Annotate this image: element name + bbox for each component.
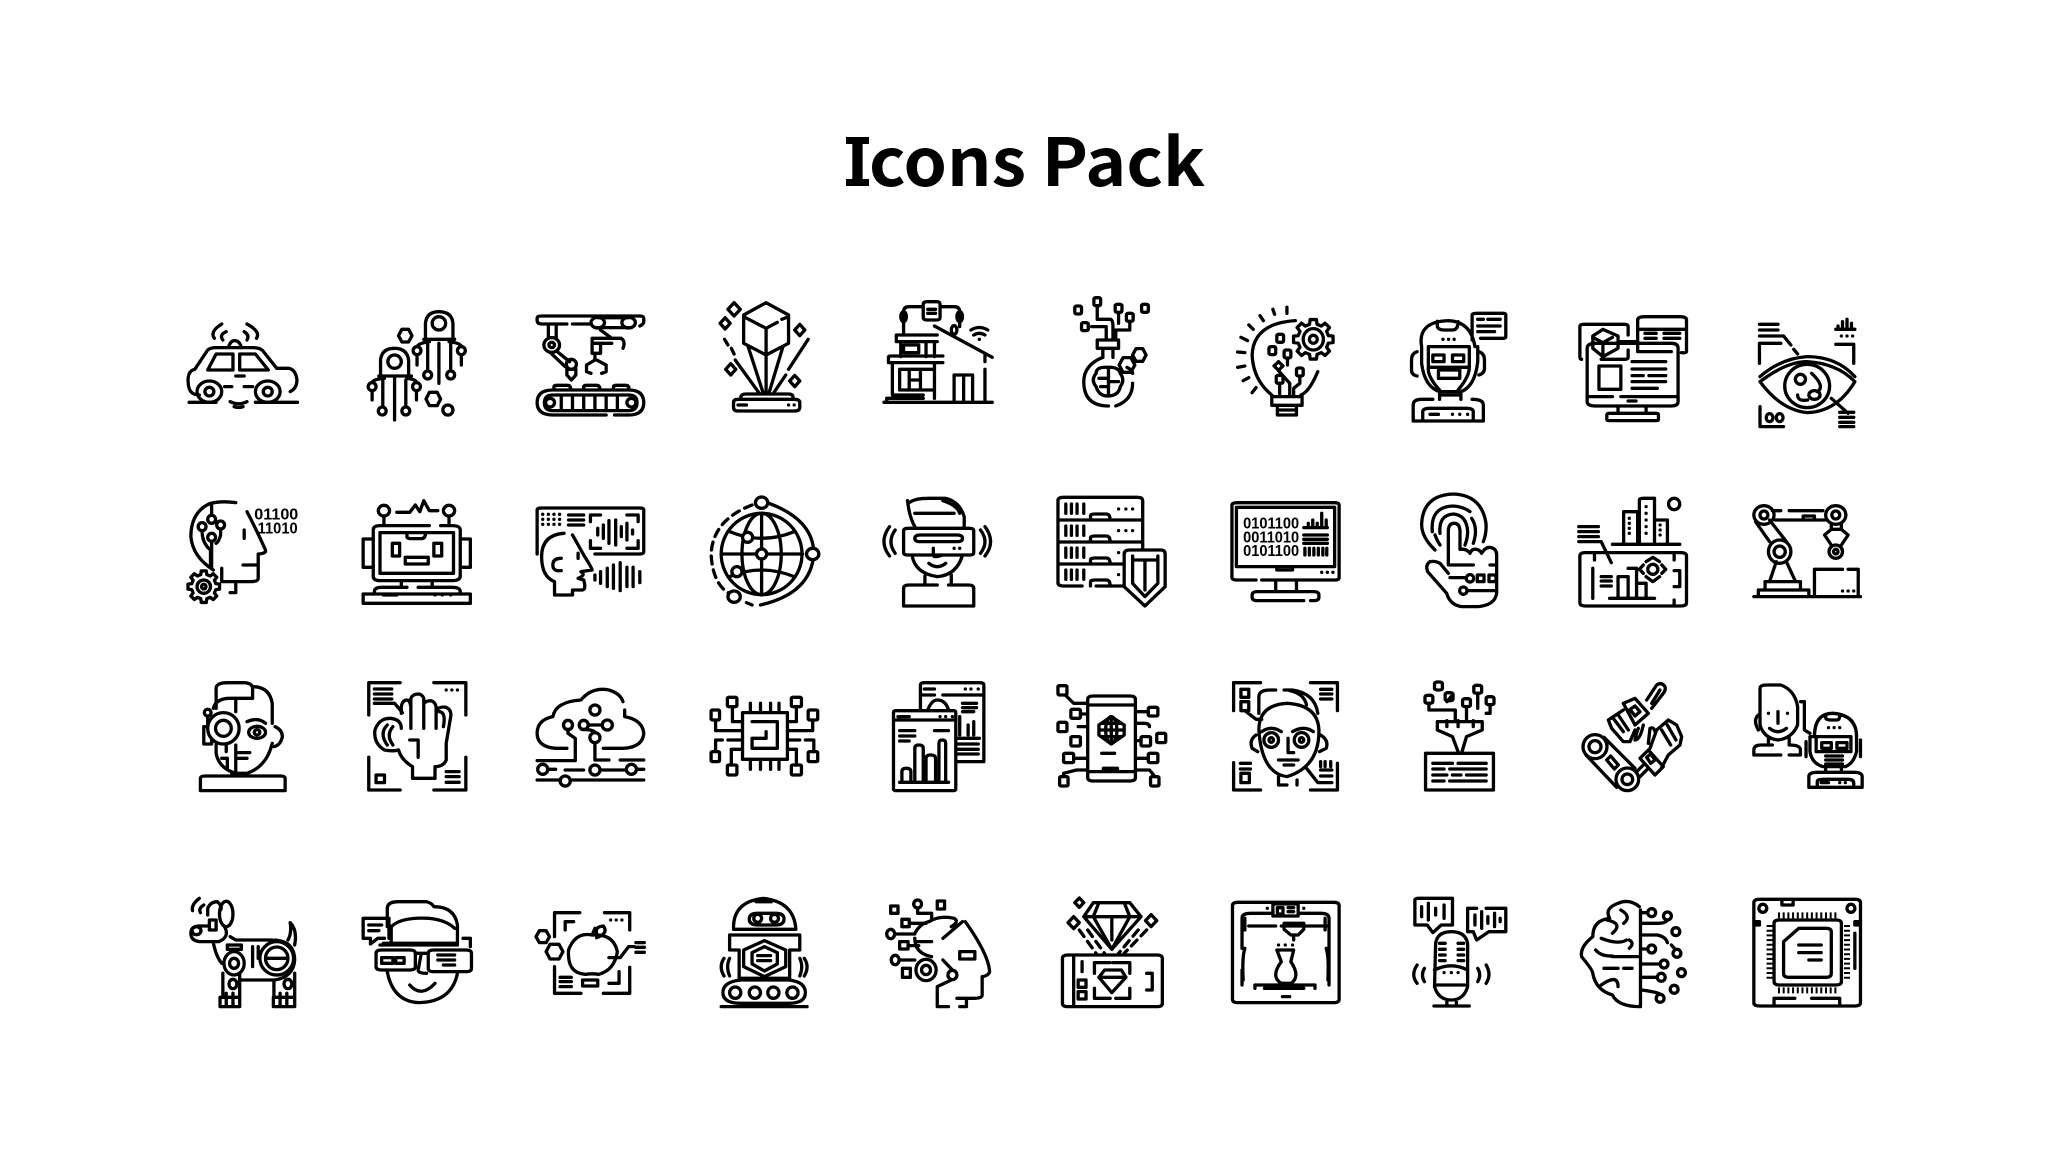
icon: robot dog: [191, 898, 295, 1007]
icon: CPU board: [1754, 899, 1860, 1006]
icon: robotic hands: [1583, 684, 1682, 791]
row 1, right icons: [1075, 298, 1855, 427]
icon: robot desktop: [363, 501, 470, 603]
icon: VR headset person: [884, 498, 991, 606]
row 2, right icons: [1058, 497, 1860, 606]
icon: factory robot arms and conveyor: [537, 316, 644, 415]
icon: smart house: [884, 302, 992, 402]
icon: industrial robot arm: [1754, 506, 1860, 597]
icon: cyborg head: [200, 683, 285, 791]
icon: hand scan: [369, 683, 466, 790]
icon: binary code monitor: 0101100: [1243, 515, 1299, 532]
row 1, left icons: [188, 302, 992, 420]
icon: report windows: [893, 683, 984, 791]
icon: nano robots: [368, 312, 465, 420]
icon: tracked robot: [721, 898, 807, 1007]
icon: cloud network: [537, 689, 644, 786]
row 2, left icons: [188, 497, 991, 606]
icon: AI head with binary: 11010: [258, 521, 298, 538]
icon: half brain half circuit: [1581, 901, 1685, 1007]
icon: processor chip: [711, 697, 818, 775]
icon: voice recognition: [537, 508, 644, 595]
icon: idea bulb with gear: [1238, 307, 1333, 415]
icon: microphone with speech bubbles: [1414, 898, 1506, 1006]
icon: 3D printer: [1232, 902, 1339, 1003]
icon: globe with orbit: [711, 497, 819, 605]
icon: touch hand: [1422, 494, 1497, 607]
title: Icons Pack: [846, 110, 1205, 206]
icon: AI head with binary: 01100: [254, 506, 298, 523]
icon: robot with speech bubble: [1412, 313, 1506, 421]
icon: AI head with binary: [188, 502, 298, 602]
icon: data funnel: [1425, 682, 1494, 790]
row 3, left icons: [200, 683, 984, 791]
icon: face recognition: [1234, 683, 1337, 790]
icon: digital AI head: [887, 900, 990, 1007]
icon: brain flask: [1075, 298, 1148, 406]
icon: monitor with web content: [1580, 317, 1687, 421]
icon: binary code monitor: [1232, 503, 1339, 601]
icon: connected car: [188, 324, 297, 407]
icon: smart city phone: [1579, 498, 1687, 606]
icon: apple scan: [536, 913, 644, 993]
icon: binary code monitor: 0101100: [1243, 543, 1299, 560]
icon: human and robot: [1754, 685, 1862, 787]
icon: gem phone: [1062, 898, 1162, 1007]
icon: hologram cube: [720, 303, 808, 411]
icon: person with smart glasses: [363, 902, 471, 1003]
icon: server with shield: [1058, 497, 1165, 606]
row 4, right icons: [1062, 898, 1860, 1007]
icon: binary code monitor: 0011010: [1243, 530, 1299, 547]
row 4, left icons: [191, 898, 990, 1007]
icon: phone with circuit: [1058, 686, 1166, 786]
row 3, right icons: [1058, 682, 1862, 790]
icon: eye scan: [1759, 319, 1855, 427]
